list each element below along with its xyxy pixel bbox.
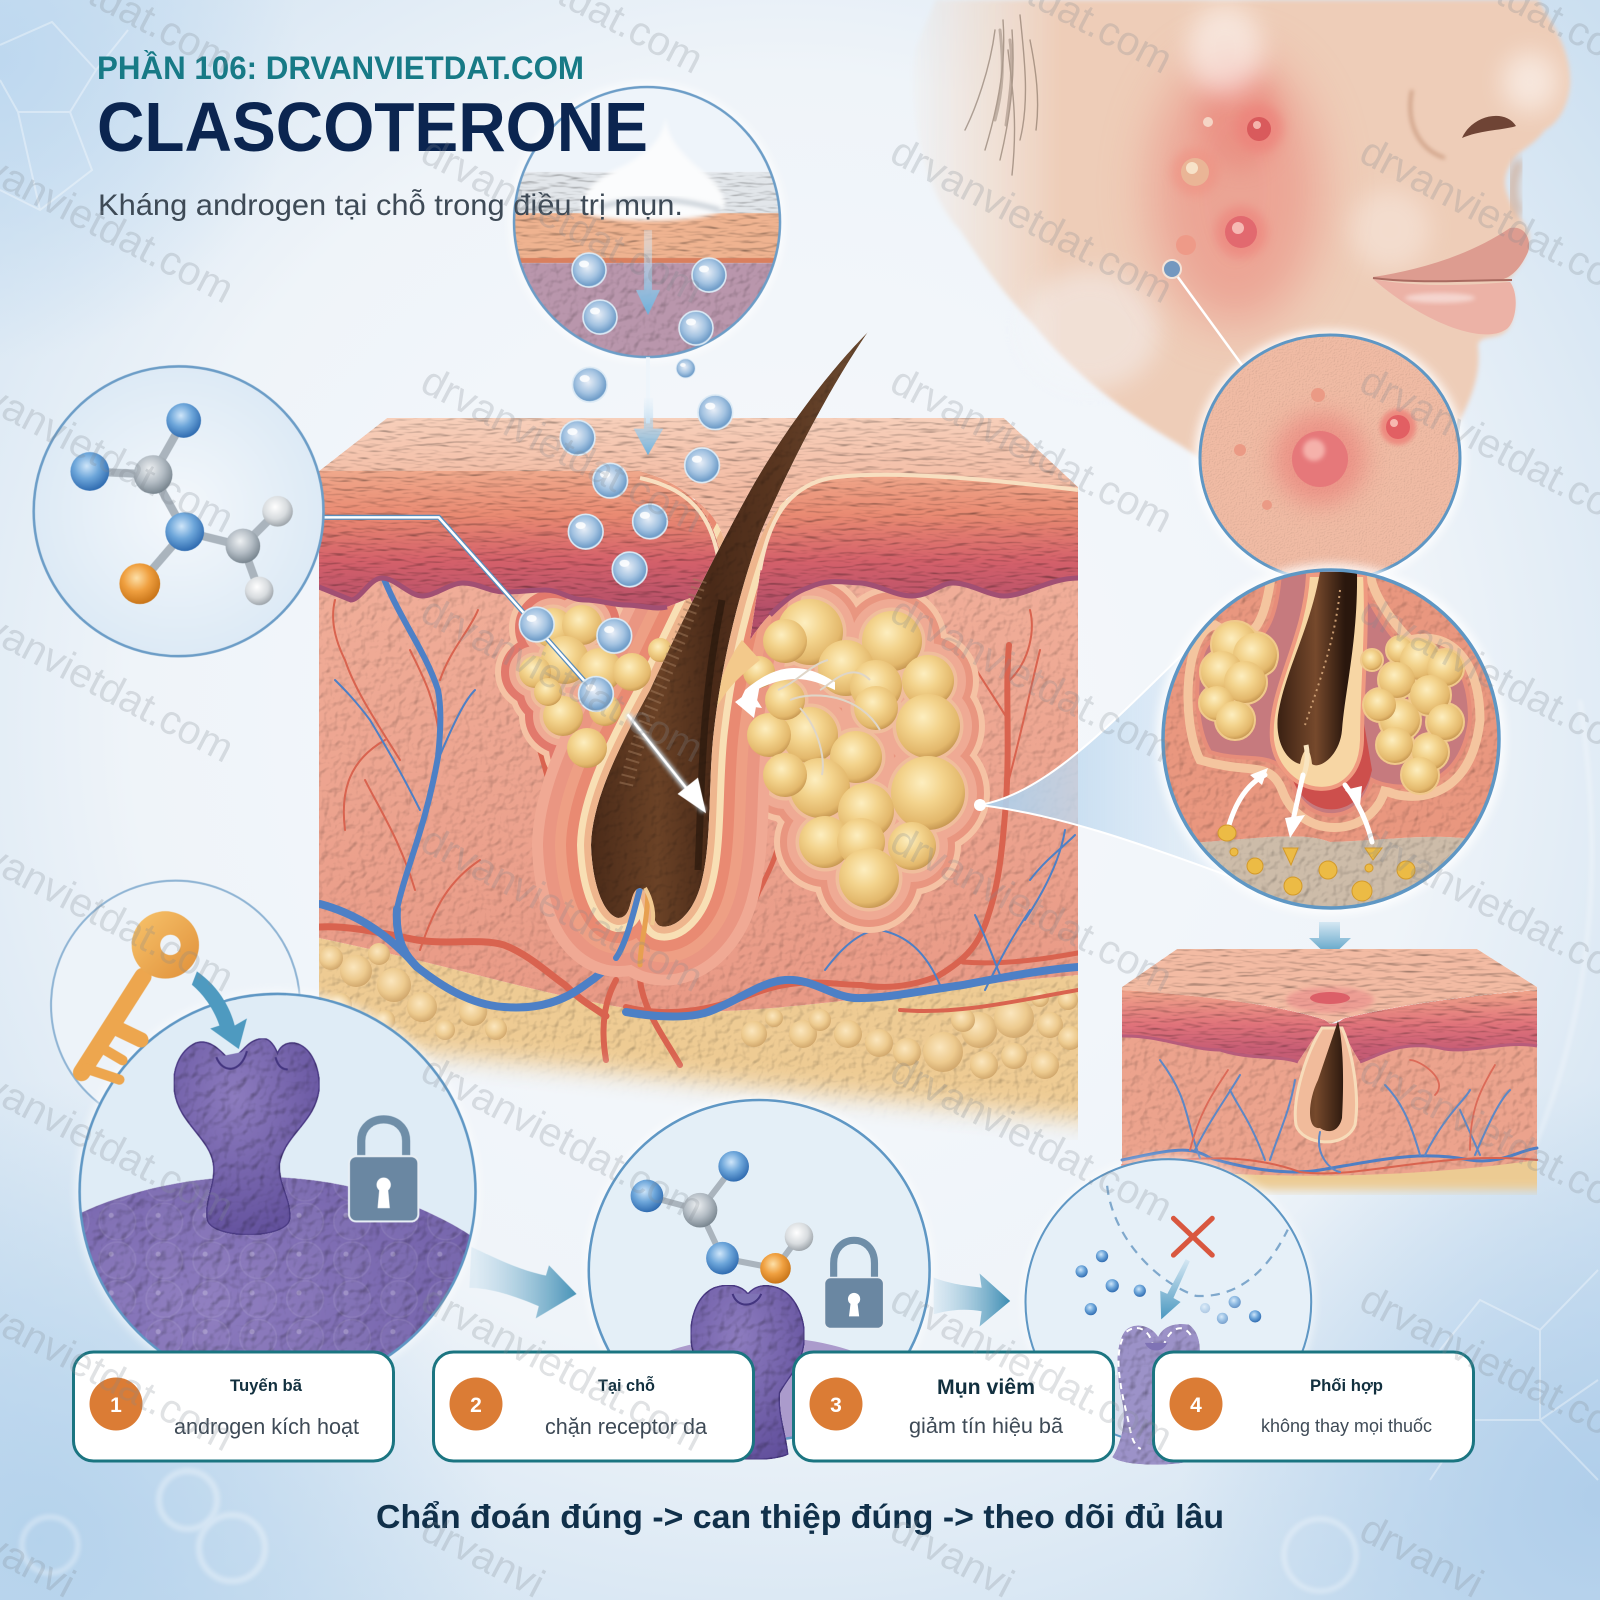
blood vessels [320,574,1078,1065]
key [82,911,199,1080]
group in reference-pixel display scale [32,85,1316,1465]
connector line from molecule [323,517,596,694]
card 1: androgen kích hoạt [174,1414,359,1439]
signal dots [1076,1250,1261,1324]
watermark: drvanvietdat.com [884,587,1180,771]
card 2: chặn receptor da [545,1414,708,1439]
arrow: to follicle [628,714,706,813]
panel: main skin cross-section [319,418,1078,1136]
panel: resolved skin block [1122,949,1537,1195]
panel: receptor circle 2 [588,1094,931,1460]
header: section label: PHẦN 106: DRVANVIETDAT.COM [97,50,584,86]
arrow: penetration [636,230,660,315]
panel: blocked signal circle 3 [1024,1150,1316,1465]
header: subtitle: Kháng androgen tại chỗ trong điều trị mụn. [98,189,683,222]
pimples [1171,104,1283,258]
watermark: drvanvietdat.com [414,127,711,312]
skin top face [319,418,1078,560]
faded receptor [1112,1324,1200,1465]
lock icon [349,1119,418,1221]
dashed docking site [1107,1186,1288,1296]
arrow: step 1 to 2 [469,1247,577,1318]
watermark: drvanvietdat.com [884,816,1180,1001]
watermark: drvanvietdat.com [884,1275,1180,1460]
gland halos [519,599,965,908]
epidermis left [319,471,719,607]
lock icon [824,1240,884,1329]
footer message: Chẩn đoán đúng -> can thiệp đúng -> theo dõi đủ lâu [376,1499,1224,1536]
sebaceous glands [519,599,965,908]
card 3 [794,1352,1114,1461]
card 1 [74,1352,394,1461]
card 4: Phối hợp [1310,1377,1383,1395]
magnifier cone [974,600,1240,880]
pointer from cheek to zoom circle [1163,260,1242,365]
card 2 [434,1352,754,1461]
watermark: drvanvietdat.com [414,1275,711,1460]
nose [1410,90,1520,215]
drug bubbles in skin [572,253,726,345]
hair shaft [591,332,868,927]
card 3: giảm tín hiệu bã [909,1415,1063,1438]
receptor [174,1038,319,1235]
header: title: CLASCOTERONE [97,88,648,166]
card 4 [1154,1352,1474,1461]
watermark: drvanvietdat.com [414,1046,711,1230]
cream drop circle [512,85,782,358]
follicle sheath [532,500,802,986]
oil flow arrow in gland [735,660,880,775]
arrow: step 2 to 3 [934,1273,1010,1327]
watermark: drvanvietdat.com [414,587,711,771]
card 2: 2 [470,1394,482,1417]
dermis [319,580,1078,1012]
molecule bubbles [519,359,733,711]
vessels below hair [616,888,648,965]
watermark: drvanvietdat.com [884,1046,1180,1230]
panel: receptor circle 1 [72,910,477,1359]
panel: acne zoom circle [1195,330,1465,586]
arrow: key to receptor [192,971,247,1049]
arrow: diffusion into skin [634,357,663,455]
card 3: Mụn viêm [937,1376,1035,1399]
epidermis right [750,475,1078,640]
cream dollop [581,117,725,221]
watermark: drvanvietdat.com [884,127,1180,312]
watermark: drvanvietdat.com [414,816,711,1001]
panel: molecule circle [34,366,323,656]
card 1: 1 [110,1394,122,1417]
arrow: down to mini skin block [1309,922,1351,958]
red cross [1173,1218,1212,1255]
card 1: Tuyến bã [230,1377,303,1395]
cell membrane [82,1177,470,1356]
fat layer [319,938,1082,1140]
lips [1373,228,1529,334]
watermark: drvanvietdat.com [414,357,711,542]
panel: follicle zoom circle [1157,564,1510,920]
watermark: drvanvietdat.com [884,357,1180,542]
panel: key circle [51,881,300,1130]
face illustration [913,0,1570,500]
card 2: Tại chỗ [598,1376,655,1395]
blocked arrow [1160,1259,1190,1319]
card 3: 3 [830,1394,842,1417]
card 4: không thay mọi thuốc [1261,1415,1432,1436]
bound molecule [631,1151,813,1284]
card 4: 4 [1190,1394,1202,1417]
